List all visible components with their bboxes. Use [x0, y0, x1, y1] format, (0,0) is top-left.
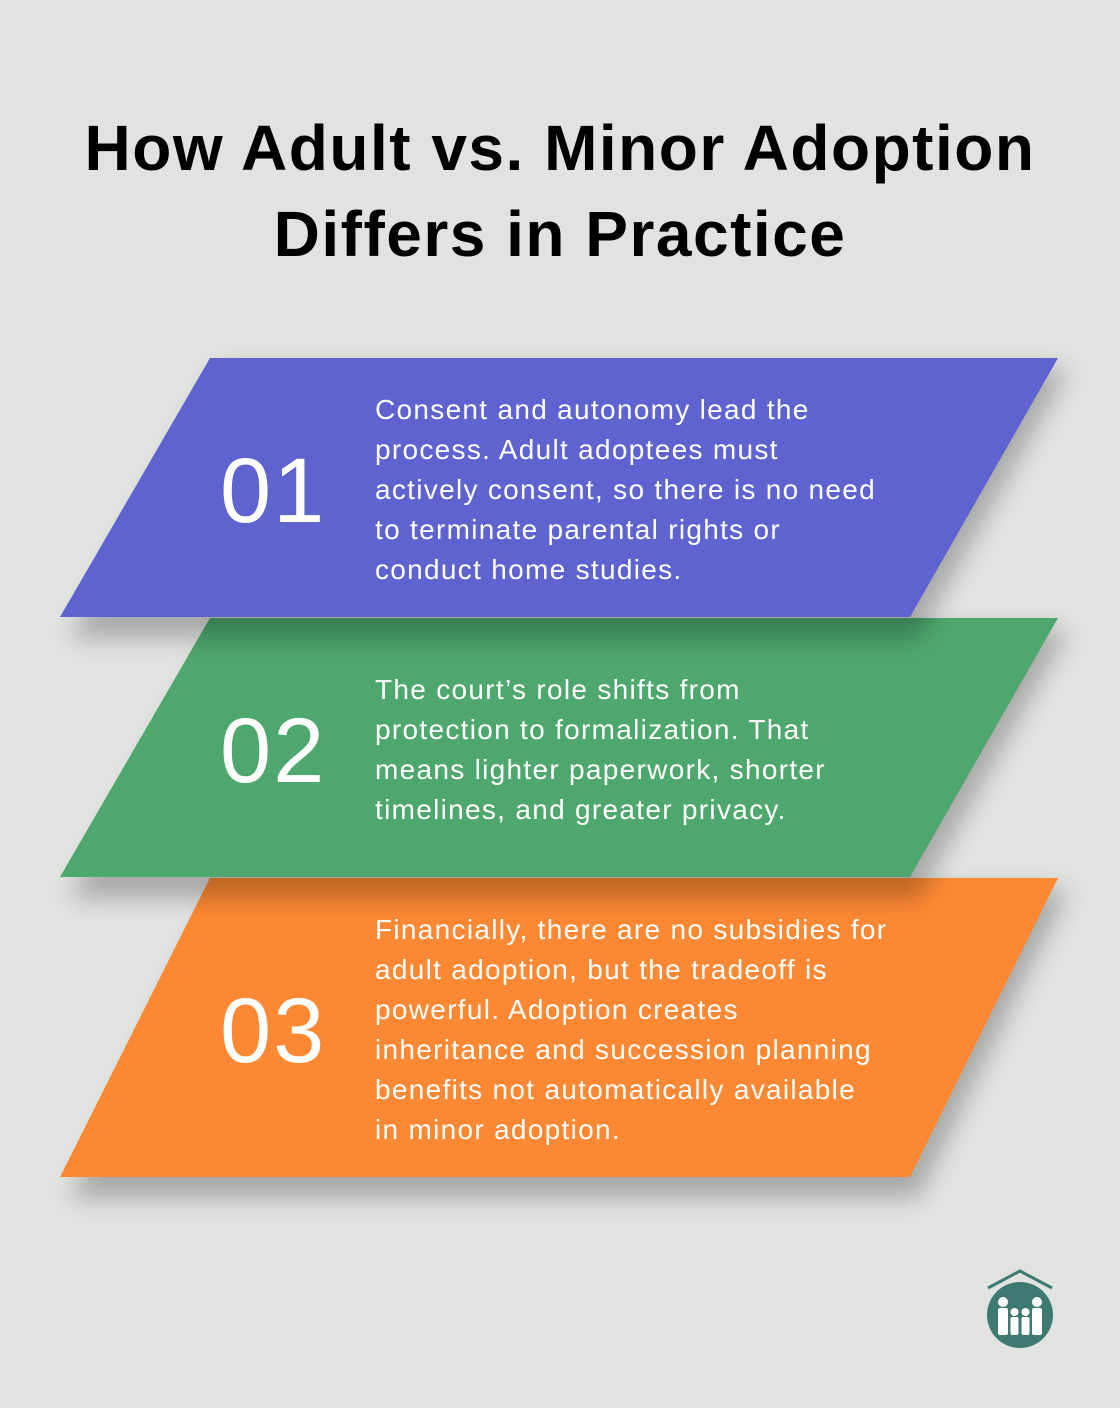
title: How Adult vs. Minor Adoption	[85, 112, 1035, 184]
title	[85, 112, 1035, 270]
text 02: means lighter paperwork, shorter	[375, 754, 826, 785]
text 01: process. Adult adoptees must	[375, 434, 779, 465]
text 02: protection to formalization. That	[375, 714, 810, 745]
number 01: 01	[220, 440, 326, 542]
text 01: to terminate parental rights or	[375, 514, 781, 545]
text 02: timelines, and greater privacy.	[375, 794, 787, 825]
title: Differs in Practice	[274, 198, 846, 270]
text 03: powerful. Adoption creates	[375, 994, 739, 1025]
number 03: 03	[220, 980, 326, 1082]
panel 3: financial	[60, 878, 1068, 1198]
text 01: actively consent, so there is no need	[375, 474, 876, 505]
text 03: inheritance and succession planning	[375, 1034, 872, 1065]
text 01: Consent and autonomy lead the	[375, 394, 810, 425]
icon: logo	[987, 1269, 1053, 1348]
panel 2: court role	[60, 618, 1068, 898]
panel 1: consent	[60, 358, 1068, 638]
text 03	[375, 914, 887, 1145]
text 01: conduct home studies.	[375, 554, 682, 585]
text 02: The court’s role shifts from	[375, 674, 741, 705]
number 02: 02	[220, 700, 326, 802]
text 03: Financially, there are no subsidies for	[375, 914, 887, 945]
text 03: adult adoption, but the tradeoff is	[375, 954, 828, 985]
text 02	[375, 674, 826, 825]
text 03: benefits not automatically available	[375, 1074, 856, 1105]
text 03: in minor adoption.	[375, 1114, 621, 1145]
text 01	[375, 394, 876, 585]
